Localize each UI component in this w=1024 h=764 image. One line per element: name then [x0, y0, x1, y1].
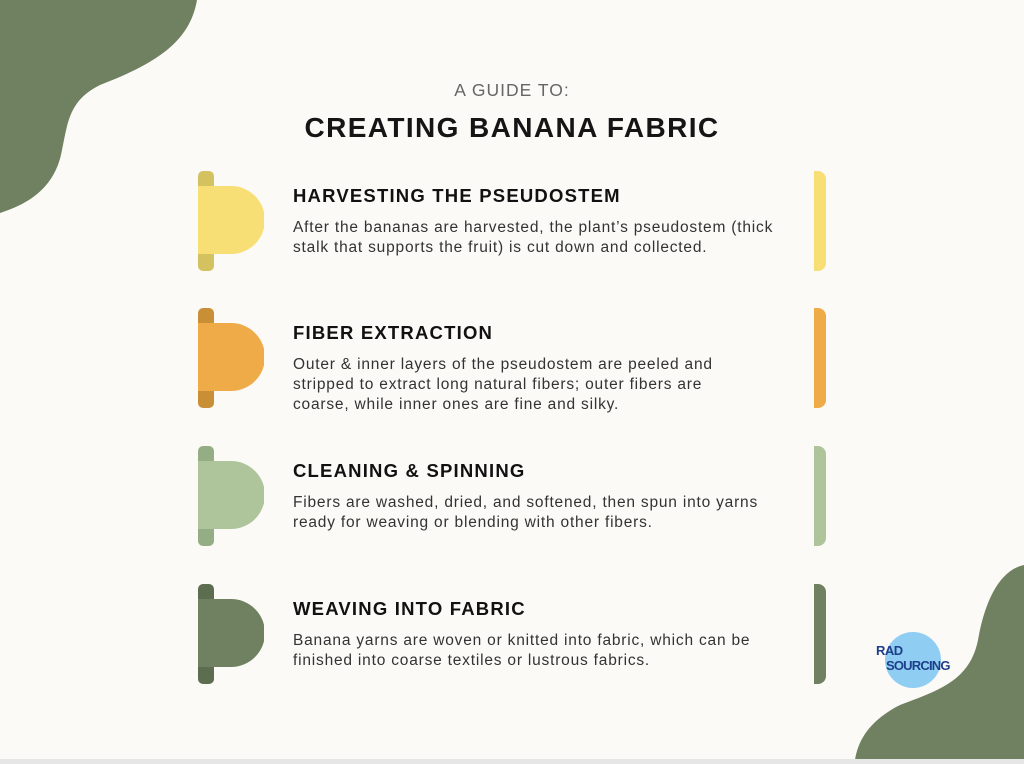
- subtitle: A GUIDE TO:: [454, 80, 570, 100]
- step 2: stripped to extract long natural fibers; outer fibers are: [293, 376, 702, 393]
- step 3: ready for weaving or blending with other fibers.: [293, 514, 653, 531]
- step 3: CLEANING & SPINNING: [293, 460, 525, 481]
- step 2: [198, 308, 826, 413]
- logo: SOURCING: [886, 658, 950, 673]
- step 4: finished into coarse textiles or lustrous fabrics.: [293, 652, 650, 669]
- step 4: Banana yarns are woven or knitted into fabric, which can be: [293, 632, 750, 649]
- step 2: coarse, while inner ones are fine and silky.: [293, 396, 619, 413]
- step 2: FIBER EXTRACTION: [293, 322, 493, 343]
- step 1: [198, 171, 826, 271]
- step 4: WEAVING INTO FABRIC: [293, 598, 526, 619]
- logo: [876, 632, 950, 688]
- step 2: Outer & inner layers of the pseudostem are peeled and: [293, 356, 713, 373]
- logo: RAD: [876, 643, 903, 658]
- step 3: Fibers are washed, dried, and softened, then spun into yarns: [293, 494, 758, 511]
- title: CREATING BANANA FABRIC: [304, 112, 720, 143]
- step 1: HARVESTING THE PSEUDOSTEM: [293, 185, 621, 206]
- icon: tab light green: [198, 446, 264, 546]
- icon: tab yellow: [198, 171, 264, 271]
- icon: tab orange: [198, 308, 264, 408]
- step 4: [198, 584, 826, 684]
- icon: tab dark green: [198, 584, 264, 684]
- step 1: stalk that supports the fruit) is cut down and collected.: [293, 239, 707, 256]
- step 1: After the bananas are harvested, the plant’s pseudostem (thick: [293, 219, 773, 236]
- step 3: [198, 446, 826, 546]
